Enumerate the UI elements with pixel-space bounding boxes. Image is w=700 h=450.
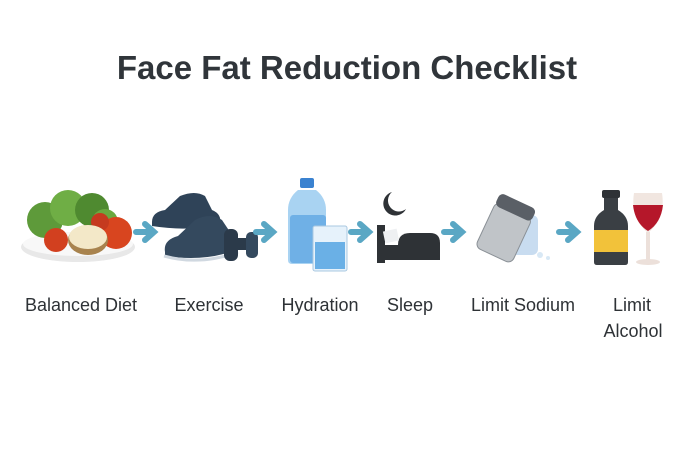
icon: water bottle and glass xyxy=(288,178,347,271)
arrow 3 xyxy=(351,224,369,240)
arrow 5 xyxy=(559,224,577,240)
icon: sneakers and dumbbell xyxy=(152,193,258,261)
arrow 4 xyxy=(444,224,462,240)
labels: Limit xyxy=(613,295,651,315)
title: Face Fat Reduction Checklist xyxy=(117,49,577,86)
labels: Balanced Diet xyxy=(25,295,137,315)
labels: Hydration xyxy=(281,295,359,315)
labels: Exercise xyxy=(174,295,244,315)
icon: balanced diet plate xyxy=(21,190,135,262)
arrow 1 xyxy=(136,224,154,240)
labels: Limit Sodium xyxy=(471,295,575,315)
icon: salt shaker xyxy=(475,193,550,264)
labels: Alcohol xyxy=(603,321,663,341)
labels xyxy=(25,295,663,341)
icon: wine bottle and glass xyxy=(594,190,663,265)
icon: sleep moon and bed xyxy=(377,192,440,263)
labels: Sleep xyxy=(387,295,433,315)
arrow 2 xyxy=(256,224,273,240)
